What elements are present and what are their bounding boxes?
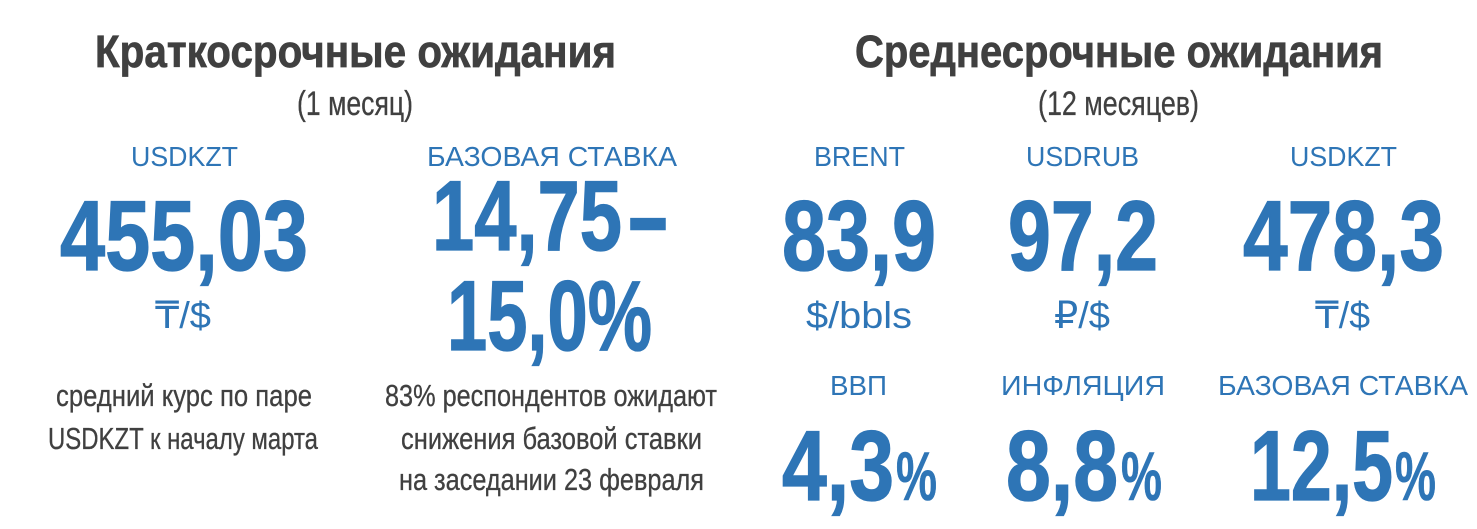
metric: USDRUB: USDRUB <box>1026 141 1139 172</box>
metric: USDKZT one month: USDKZT <box>131 141 238 172</box>
metric: Brent: $/bbls <box>806 295 912 336</box>
metric: Brent <box>782 141 936 336</box>
metric: USDKZT twelve months: USDKZT <box>1290 141 1397 172</box>
metric: USDKZT one month: 455,03 <box>60 180 308 291</box>
heading: short-term: Краткосрочные ожидания <box>95 26 616 77</box>
metric: base rate one month: 14,75 <box>432 160 622 271</box>
text block: base rate note: 83% респондентов ожидают <box>385 378 717 413</box>
metric: base rate one month: 15,0% <box>447 260 652 371</box>
text block: USDKZT note: средний курс по паре <box>56 378 312 413</box>
metric: Brent: BRENT <box>814 141 905 172</box>
text block: base rate note: снижения базовой ставки <box>401 421 702 456</box>
metric: Brent: 83,9 <box>782 180 936 291</box>
metric: base rate twelve months: % <box>1395 438 1436 515</box>
metric: USDKZT twelve months: ₸/$ <box>1315 295 1370 336</box>
text block: base rate note: на заседании 23 февраля <box>399 462 704 497</box>
metric: base rate one month: БАЗОВАЯ СТАВКА <box>427 141 677 172</box>
text block: USDKZT note: USDKZT к началу марта <box>48 421 319 456</box>
metric: inflation: % <box>1121 438 1162 515</box>
metric: USDKZT one month <box>60 141 308 336</box>
metric: inflation <box>1001 370 1165 521</box>
text block: base rate note <box>385 378 717 497</box>
metric: GDP: % <box>896 438 937 515</box>
metric: USDRUB <box>1008 141 1158 336</box>
heading: medium-term: Среднесрочные ожидания <box>855 26 1383 77</box>
panel: medium-term expectations <box>782 26 1468 521</box>
metric: base rate twelve months: 12,5 <box>1250 410 1393 521</box>
text block: USDKZT note <box>48 378 319 456</box>
metric: inflation: ИНФЛЯЦИЯ <box>1001 370 1165 401</box>
metric: GDP: 4,3 <box>782 410 894 521</box>
metric: base rate twelve months: БАЗОВАЯ СТАВКА <box>1218 370 1468 401</box>
subheading: 12 months: (12 месяцев) <box>1038 85 1199 123</box>
metric: base rate one month: – <box>629 161 667 272</box>
metric: USDKZT twelve months <box>1243 141 1444 336</box>
metric: USDRUB: 97,2 <box>1008 180 1158 291</box>
metric: base rate one month <box>427 141 677 371</box>
subheading: 1 month: (1 месяц) <box>297 85 413 123</box>
panel: short-term expectations <box>48 26 717 497</box>
metric: GDP: ВВП <box>830 370 887 401</box>
metric: USDRUB: ₽/$ <box>1054 295 1110 336</box>
metric: inflation: 8,8 <box>1006 410 1118 521</box>
metric: USDKZT one month: ₸/$ <box>155 295 211 336</box>
metric: base rate twelve months <box>1218 370 1468 521</box>
metric: GDP <box>782 370 937 521</box>
